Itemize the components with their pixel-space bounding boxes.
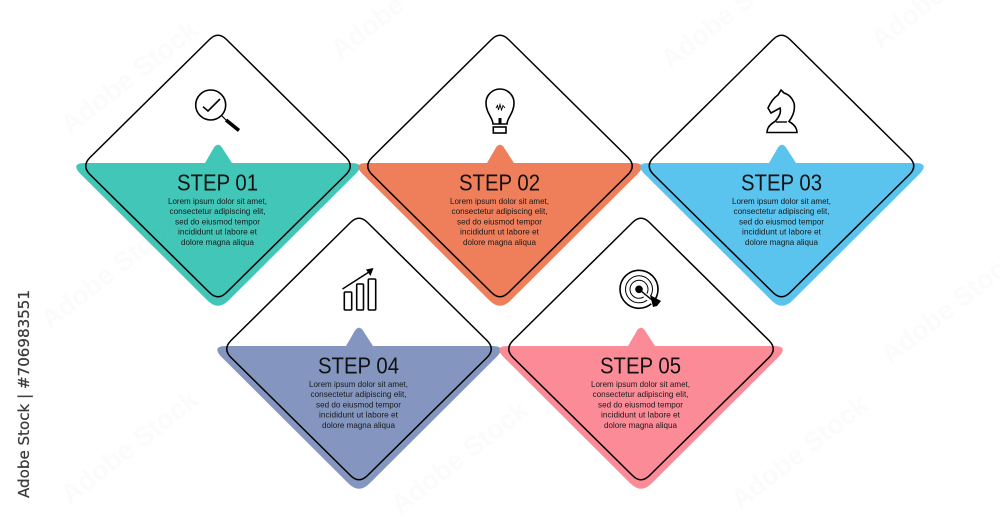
body text: consectetur adipiscing elit, — [734, 206, 830, 216]
body text — [591, 379, 690, 430]
panel: step 04 — [217, 218, 501, 489]
diamond outline — [368, 35, 632, 297]
icon: growth bar chart — [342, 268, 376, 310]
panel: step 03 — [640, 35, 924, 306]
body text: Lorem ipsum dolor sit amet, — [732, 196, 831, 206]
diamond outline — [227, 218, 491, 480]
icon: chess knight — [767, 90, 797, 132]
body text: Lorem ipsum dolor sit amet, — [450, 196, 549, 206]
body text: sed do eiusmod tempor — [175, 216, 260, 226]
body text — [450, 196, 549, 247]
heading: STEP 02 — [459, 170, 540, 196]
heading: STEP 03 — [741, 170, 822, 196]
body text: incididunt ut labore et — [460, 226, 540, 236]
stock watermarks: Adobe Stock — [55, 384, 205, 510]
stock watermarks: Adobe Stock — [725, 389, 875, 515]
icon: light bulb — [486, 89, 514, 133]
diamond outline — [649, 35, 914, 297]
body text — [168, 196, 267, 247]
body text: Lorem ipsum dolor sit amet, — [309, 379, 408, 389]
body text: sed do eiusmod tempor — [457, 216, 542, 226]
body text: dolore magna aliqua — [604, 420, 677, 430]
orange triangle fill — [358, 145, 642, 306]
blue triangle fill — [640, 145, 924, 306]
teal triangle fill — [76, 145, 360, 306]
body text: consectetur adipiscing elit, — [592, 389, 688, 399]
body text: sed do eiusmod tempor — [598, 400, 683, 410]
body text: dolore magna aliqua — [322, 420, 395, 430]
body text: consectetur adipiscing elit, — [310, 389, 406, 399]
body text: sed do eiusmod tempor — [739, 216, 824, 226]
diamond outline — [509, 218, 773, 480]
heading: STEP 04 — [318, 353, 399, 379]
diamond outline — [86, 35, 350, 297]
body text: Lorem ipsum dolor sit amet, — [591, 379, 690, 389]
body text: incididunt ut labore et — [178, 226, 258, 236]
heading: STEP 05 — [600, 353, 681, 379]
body text: consectetur adipiscing elit, — [170, 206, 266, 216]
body text: incididunt ut labore et — [601, 410, 681, 420]
body text — [309, 379, 408, 430]
panel: step 01 — [76, 35, 360, 306]
stock watermarks: Adobe Stock — [55, 14, 205, 140]
body text: incididunt ut labore et — [742, 226, 822, 236]
body text: dolore magna aliqua — [745, 237, 818, 247]
body text: sed do eiusmod tempor — [316, 400, 401, 410]
panel: step 02 — [358, 35, 642, 306]
panel: step 05 — [499, 218, 783, 489]
body text: dolore magna aliqua — [463, 237, 536, 247]
pink triangle fill — [499, 328, 783, 489]
slate blue triangle fill — [217, 328, 501, 489]
body text — [732, 196, 831, 247]
stock watermarks: Adobe Stock — [35, 209, 185, 335]
body text: incididunt ut labore et — [319, 410, 399, 420]
icon: magnifier with check — [196, 90, 239, 130]
icon: target with arrow — [620, 270, 661, 308]
body text: consectetur adipiscing elit, — [452, 206, 548, 216]
heading: STEP 01 — [177, 170, 258, 196]
body text: Lorem ipsum dolor sit amet, — [168, 196, 267, 206]
side stock id label: Adobe Stock | #706983551 — [15, 290, 33, 498]
stock watermarks: Adobe Stock — [385, 394, 535, 520]
body text: dolore magna aliqua — [181, 237, 254, 247]
